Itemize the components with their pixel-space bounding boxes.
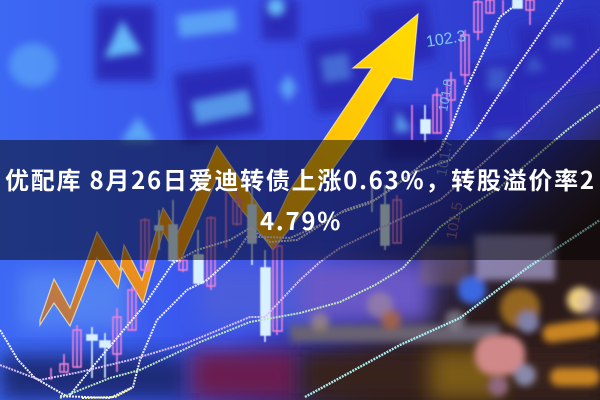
title [5,161,596,237]
title band [0,140,600,260]
candlesticks [51,0,534,380]
rising arrow [40,14,418,326]
title: 4.79% [260,202,342,237]
bokeh lights [311,235,600,396]
blurred light blobs [9,0,572,142]
axis label 101.8: 101.8 [435,78,456,113]
blurred colour zones [0,262,600,400]
blurred dark tiles [95,0,600,160]
title: 优配库 8月26日爱迪转债上涨0.63%，转股溢价率2 [5,161,596,196]
axis label 102.3: 102.3 [425,28,467,51]
axis label 101.7: 101.7 [433,138,456,178]
axis label 101.5: 101.5 [443,201,466,241]
